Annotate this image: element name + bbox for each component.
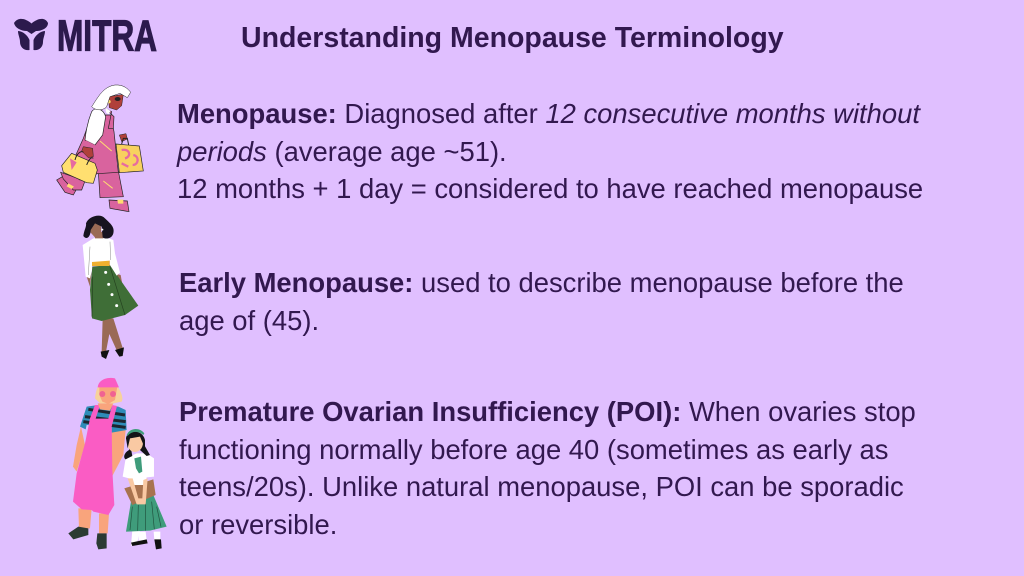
text: Menopause definition: Menopause: Diagnosed after 12 consecutive months without <box>177 98 920 129</box>
text: Menopause definition: 12 months + 1 day = considered to have reached menopause <box>177 173 923 204</box>
text: Premature Ovarian Insufficiency definition: or reversible. <box>179 508 337 540</box>
text: Premature Ovarian Insufficiency definition: teens/20s). Unlike natural menopause, POI can be sporadic <box>179 471 904 502</box>
text: Early Menopause definition <box>179 267 904 336</box>
logo: Mitra <box>14 12 157 60</box>
title: Understanding Menopause Terminology <box>241 22 784 54</box>
text: Premature Ovarian Insufficiency definition <box>179 396 916 540</box>
text: Early Menopause definition: Early Menopause: used to describe menopause before the <box>179 267 904 298</box>
icon: logo mark <box>14 19 48 50</box>
text: Premature Ovarian Insufficiency definition: functioning normally before age 40 (sometimes as early as <box>179 434 888 464</box>
text: Early Menopause definition: age of (45). <box>179 304 319 336</box>
text: Menopause definition: periods (average age ~51). <box>177 136 507 166</box>
text: Premature Ovarian Insufficiency definition: Premature Ovarian Insufficiency (POI): When ovaries stop <box>179 396 916 427</box>
text: Menopause definition <box>176 98 923 204</box>
